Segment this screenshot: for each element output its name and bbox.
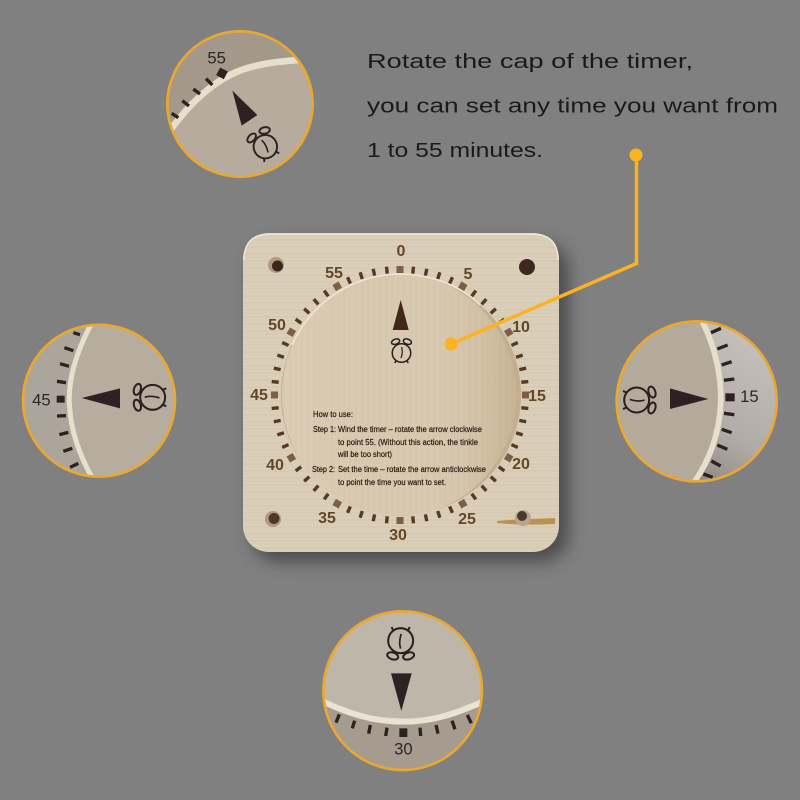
dial numbers: 20 xyxy=(512,456,530,473)
callout: detail at 15 xyxy=(610,320,780,483)
mounting holes xyxy=(265,257,535,527)
callout: detail at 45 xyxy=(20,320,183,480)
dial numbers: 10 xyxy=(512,319,530,336)
dial numbers: 30 xyxy=(389,527,407,544)
dial numbers: 0 xyxy=(397,243,406,260)
icon: alarm clock on cap xyxy=(391,338,412,363)
dial numbers: 25 xyxy=(458,511,476,528)
icon: arrow on cap xyxy=(393,300,409,330)
panel: rotating cap xyxy=(281,274,521,516)
dial numbers: 15 xyxy=(528,388,546,405)
text: how to use: to point 55. (Without this action, the tinkle xyxy=(338,438,478,447)
callout: detail at 55: 55 xyxy=(207,49,226,68)
caption text xyxy=(367,51,778,162)
text: how to use: Set the time – rotate the arrow anticlockwise xyxy=(338,465,486,474)
dial numbers xyxy=(250,243,546,544)
dial numbers: 55 xyxy=(325,265,343,282)
panel: wooden timer board xyxy=(243,233,559,552)
callout: detail at 45: 45 xyxy=(32,390,51,409)
text: how to use: Wind the timer – rotate the arrow clockwise xyxy=(338,425,482,434)
dial numbers: 40 xyxy=(266,457,284,474)
callout: detail at 30: 30 xyxy=(394,740,413,759)
text: how to use xyxy=(312,410,486,487)
text: how to use: Step 1: xyxy=(313,425,336,434)
dial tick marks xyxy=(271,266,529,524)
text: how to use: How to use: xyxy=(313,410,353,419)
dial numbers: 45 xyxy=(250,387,268,404)
dial numbers: 5 xyxy=(464,266,473,283)
icon: wood knot xyxy=(497,518,555,525)
dial numbers: 50 xyxy=(268,317,286,334)
callout: detail at 30 xyxy=(320,610,487,773)
text: how to use: to point the time you want to set. xyxy=(338,478,446,487)
caption text: Rotate the cap of the timer, xyxy=(367,51,693,73)
arrow: leader line from caption to cap xyxy=(444,148,642,350)
board shadow xyxy=(251,242,569,562)
text: how to use: will be too short) xyxy=(337,450,392,459)
caption text: 1 to 55 minutes. xyxy=(367,140,543,162)
callout: detail at 15: 15 xyxy=(740,387,759,406)
text: how to use: Step 2: xyxy=(312,465,335,474)
dial numbers: 35 xyxy=(318,510,336,527)
callout: detail at 55 xyxy=(166,30,314,178)
caption text: you can set any time you want from xyxy=(367,96,778,118)
